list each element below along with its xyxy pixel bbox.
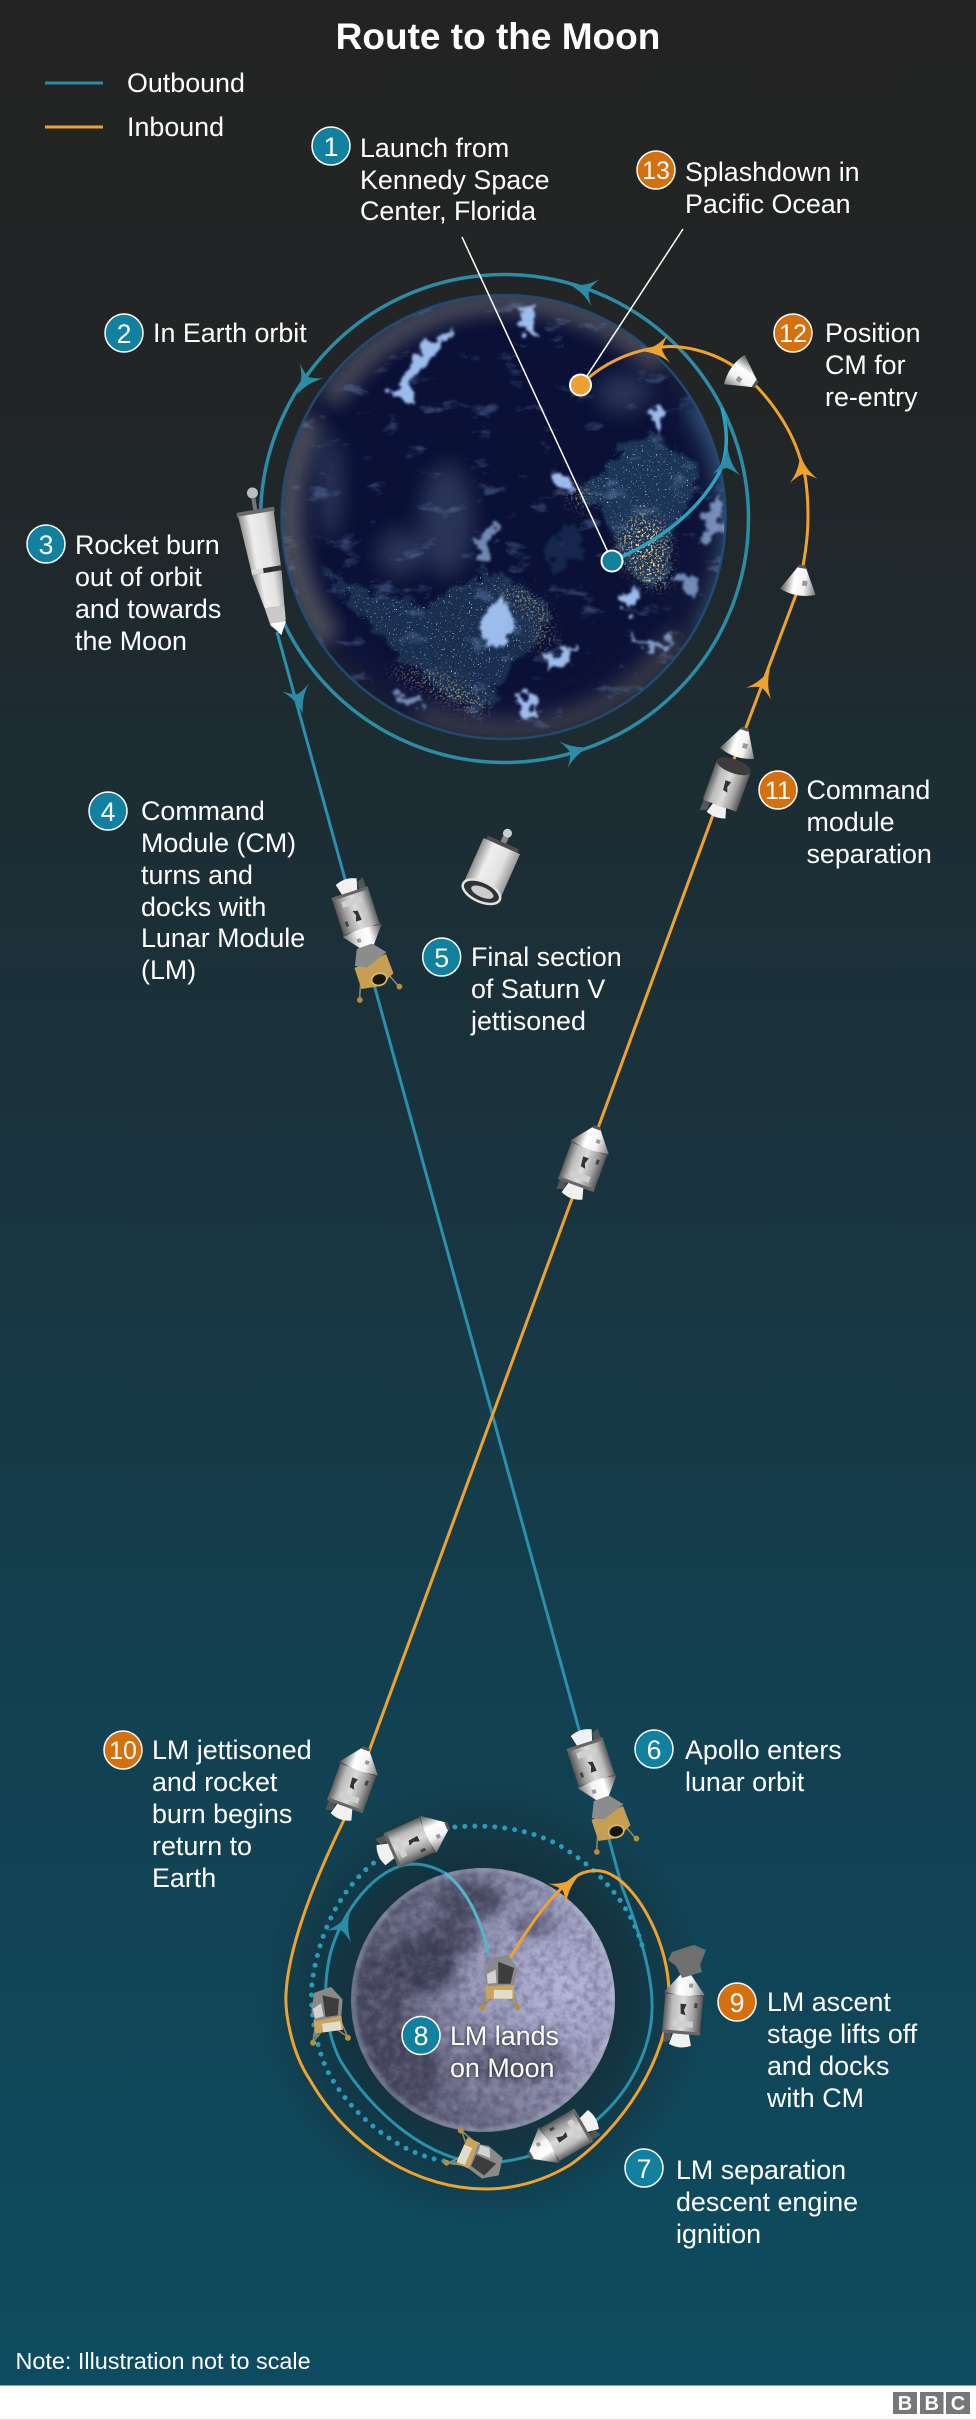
- legend: [45, 68, 245, 142]
- outbound trajectory to lunar orbit: [277, 632, 652, 2163]
- direction arrows: [282, 272, 818, 1943]
- step 4 label: Module (CM): [141, 828, 296, 858]
- step 5 label: of Saturn V: [471, 974, 605, 1004]
- step 2 label: In Earth orbit: [153, 318, 307, 348]
- step 11 label: [759, 771, 932, 869]
- step 12 label: Position: [825, 318, 920, 348]
- step 6 label: lunar orbit: [685, 1767, 805, 1797]
- step 13 label: Pacific Ocean: [685, 189, 851, 219]
- step 9 label: stage lifts off: [767, 2019, 918, 2049]
- pointer line: splashdown: [581, 229, 683, 385]
- moon halo: [258, 1775, 708, 2225]
- moon: [351, 1868, 615, 2132]
- command module separating: [719, 722, 762, 762]
- earth orbit: [260, 274, 748, 762]
- step 9 label: with CM: [766, 2083, 864, 2113]
- footer band: [0, 2385, 976, 2420]
- CSM at top of lunar orbit: [371, 1807, 457, 1875]
- step 12 label: CM for: [825, 350, 906, 380]
- CSM with ascent stage, step 9: [660, 1945, 706, 2049]
- step 10 label: LM jettisoned: [152, 1735, 312, 1765]
- CSM at bottom of lunar orbit: [519, 2101, 605, 2174]
- legend: Outbound: [127, 68, 245, 98]
- step 3 label: and towards: [75, 594, 221, 624]
- step 5 label: Final section: [471, 942, 622, 972]
- step 10 label: 10: [109, 1737, 137, 1765]
- step 6 label: Apollo enters: [685, 1735, 842, 1765]
- step 9 label: LM ascent: [767, 1987, 891, 2017]
- step 1 label: 1: [324, 132, 338, 162]
- step 12 label: [774, 314, 920, 412]
- step 10 label: [104, 1731, 312, 1893]
- step 5 label: 5: [434, 943, 449, 973]
- step 7 label: [625, 2149, 858, 2249]
- command module re-entry position: [721, 353, 767, 400]
- step 2 label: [105, 314, 307, 352]
- step 11 label: module: [806, 807, 895, 837]
- step 1 label: Center, Florida: [360, 196, 536, 226]
- splashdown marker: [570, 374, 591, 396]
- step 4 label: [89, 792, 305, 985]
- step 10 label: Earth: [152, 1863, 216, 1893]
- step 1 label: [312, 127, 550, 226]
- BBC logo: [893, 2392, 970, 2415]
- step 7 label: descent engine: [676, 2187, 858, 2217]
- step 8 label: 8: [414, 2021, 428, 2051]
- step 13 label: Splashdown in: [685, 157, 860, 187]
- step 3 label: the Moon: [75, 626, 187, 656]
- LM at bottom of lunar orbit: [443, 2127, 510, 2187]
- LM on the Moon: [479, 1955, 521, 2011]
- step 11 label: 11: [765, 777, 791, 805]
- note: Note: Illustration not to scale: [16, 2348, 311, 2374]
- step 6 label: 6: [647, 1735, 661, 1765]
- legend: Inbound: [127, 112, 224, 142]
- step 10 label: burn begins: [152, 1799, 292, 1829]
- command module mid return: [779, 562, 820, 598]
- step 10 label: and rocket: [152, 1767, 278, 1797]
- step 3 label: Rocket burn: [75, 530, 220, 560]
- step 4 label: Command: [141, 796, 265, 826]
- step 8 label: on Moon: [450, 2053, 554, 2083]
- CSM leaving Moon: [321, 1741, 385, 1826]
- BBC logo: C: [951, 2393, 965, 2415]
- final Saturn V section: [459, 821, 528, 909]
- step 3 label: out of orbit: [75, 562, 202, 592]
- launch site marker: [602, 550, 622, 572]
- docked CSM and LM, step 6: [561, 1724, 641, 1855]
- step 5 label: [423, 938, 622, 1036]
- BBC logo: B: [924, 2393, 939, 2415]
- earth: [281, 295, 736, 739]
- service module, step 11: [698, 753, 753, 823]
- step 12 label: 12: [779, 320, 807, 348]
- step 13 label: [637, 151, 860, 219]
- step 12 label: re-entry: [825, 382, 918, 412]
- LM at left of lunar orbit: [303, 1985, 351, 2046]
- step 1 label: Kennedy Space: [360, 165, 550, 195]
- step 4 label: (LM): [141, 955, 196, 985]
- step 4 label: Lunar Module: [141, 923, 305, 953]
- step 1 label: Launch from: [360, 133, 509, 163]
- BBC logo: B: [898, 2393, 912, 2415]
- step 9 label: [718, 1983, 918, 2113]
- launch trajectory: [612, 408, 726, 561]
- Saturn V rocket: [233, 484, 295, 639]
- step 13 label: 13: [642, 157, 670, 185]
- step 7 label: 7: [637, 2154, 651, 2184]
- step 10 label: return to: [152, 1831, 252, 1861]
- step 4 label: docks with: [141, 892, 266, 922]
- step 4 label: turns and: [141, 860, 253, 890]
- step 11 label: Command: [806, 775, 930, 805]
- CSM on return path: [552, 1120, 616, 1205]
- step 9 label: 9: [730, 1988, 744, 2018]
- descent path on moon: [445, 1873, 488, 1953]
- step 5 label: jettisoned: [470, 1006, 586, 1036]
- pointer line: launch: [462, 237, 612, 561]
- step 8 label: [402, 2016, 559, 2083]
- step 8 label: LM lands: [450, 2021, 559, 2051]
- docked CSM and LM, step 4: [326, 873, 404, 1003]
- step 2 label: 2: [117, 319, 131, 349]
- step 3 label: [27, 525, 221, 656]
- step 11 label: separation: [806, 839, 932, 869]
- step 7 label: LM separation: [676, 2155, 846, 2185]
- step 7 label: ignition: [676, 2219, 761, 2249]
- step 4 label: 4: [101, 797, 116, 827]
- inbound line: [286, 347, 808, 2189]
- step 9 label: and docks: [767, 2051, 889, 2081]
- dotted lunar orbit: [311, 1826, 642, 2163]
- step 6 label: [635, 1730, 842, 1797]
- step 3 label: 3: [39, 530, 53, 560]
- title: Route to the Moon: [336, 16, 660, 57]
